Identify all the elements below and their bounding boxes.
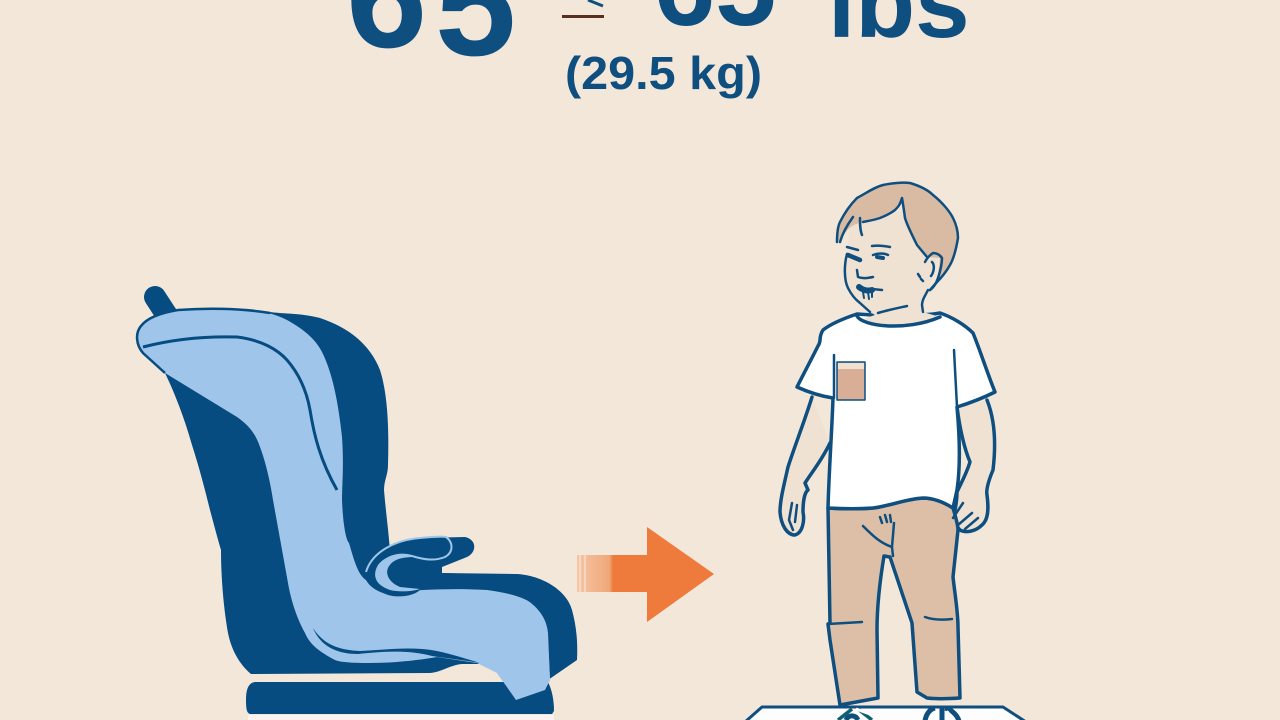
scale platform: [745, 707, 1026, 720]
head outline: [837, 183, 958, 313]
illustration: car seat: [137, 297, 577, 720]
headrest peg: [155, 297, 170, 320]
arms: [780, 397, 995, 535]
arrow shaft: [577, 555, 649, 592]
seat crease: [313, 628, 480, 663]
base highlight: [248, 715, 554, 720]
cushion outline: [137, 309, 270, 373]
seat shell: [165, 309, 577, 680]
large number 65: [346, 0, 516, 86]
shirt seams: [834, 350, 957, 407]
hair: [837, 183, 958, 282]
illustration: child: [745, 183, 1026, 720]
cushion front fold: [497, 640, 550, 700]
face and neck: [845, 210, 940, 326]
pocket: [837, 362, 865, 400]
fingers: [789, 503, 978, 530]
facial features: [847, 246, 890, 299]
ear: [918, 253, 942, 290]
shoes: [838, 707, 959, 720]
right shoe: [925, 707, 959, 720]
back crease: [143, 337, 337, 490]
armrest: [365, 537, 500, 596]
seat base: [246, 682, 554, 714]
collar: [857, 316, 940, 326]
left shoe: [838, 709, 872, 720]
shaft stripes: [580, 555, 585, 592]
arrow: [577, 527, 714, 622]
heading: weight limit: [346, 0, 970, 99]
seat cushion: [137, 309, 550, 700]
arrow head: [647, 527, 714, 622]
pants: [828, 498, 960, 705]
shirt: [797, 313, 995, 509]
comparison symbol: [562, 0, 604, 18]
pants details: [828, 515, 952, 624]
metric weight: (29.5 kg): [565, 47, 762, 99]
